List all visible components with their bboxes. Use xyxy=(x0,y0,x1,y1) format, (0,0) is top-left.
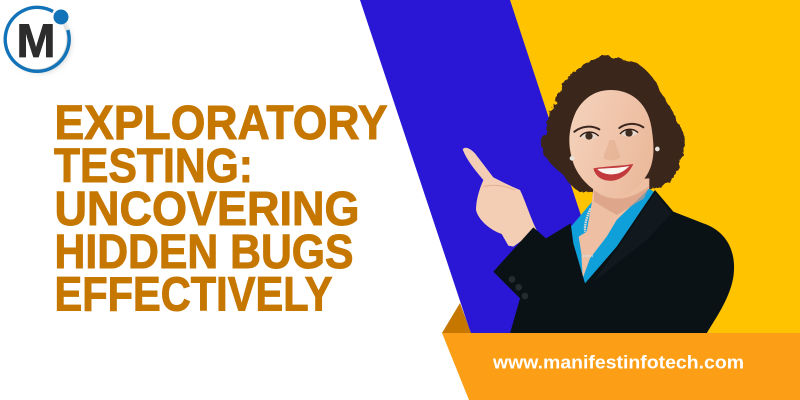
neck shadow xyxy=(594,186,649,215)
blue shirt xyxy=(570,188,657,287)
hand pointing xyxy=(463,148,537,247)
jacket xyxy=(493,190,734,333)
hair xyxy=(542,57,685,193)
eye left xyxy=(581,133,597,139)
lips xyxy=(593,164,633,181)
logo xyxy=(5,7,71,73)
shape: dark orange fold triangle xyxy=(442,303,471,333)
website url: www.manifestinfotech.com xyxy=(492,352,744,372)
earrings xyxy=(570,156,574,161)
footer band xyxy=(442,333,800,400)
eye right xyxy=(621,130,637,136)
logo inner disc xyxy=(6,9,66,69)
nose shadow xyxy=(604,140,620,160)
title line 4: HIDDEN BUGS xyxy=(54,226,354,279)
sleeve buttons xyxy=(509,276,528,299)
panel: blue slanted band xyxy=(360,0,620,334)
title xyxy=(54,97,388,322)
title line 3: UNCOVERING xyxy=(54,183,360,236)
logo shadow xyxy=(9,11,71,73)
photo: smiling woman pointing xyxy=(463,57,734,333)
title line 1: EXPLORATORY xyxy=(54,97,388,150)
pearl necklace xyxy=(583,208,593,256)
neck and chest xyxy=(579,178,649,278)
title line 2: TESTING: xyxy=(54,140,253,193)
title line 5: EFFECTIVELY xyxy=(54,268,332,322)
eyebrows xyxy=(574,124,643,132)
logo ring xyxy=(5,7,69,71)
logo letter: M xyxy=(16,14,56,67)
eyes xyxy=(580,129,638,140)
teeth xyxy=(597,166,629,174)
panel: yellow slanted band xyxy=(509,0,800,334)
face xyxy=(569,90,653,197)
logo dot xyxy=(54,10,68,24)
finger crease xyxy=(483,185,515,190)
jacket lapel highlight xyxy=(592,193,672,283)
